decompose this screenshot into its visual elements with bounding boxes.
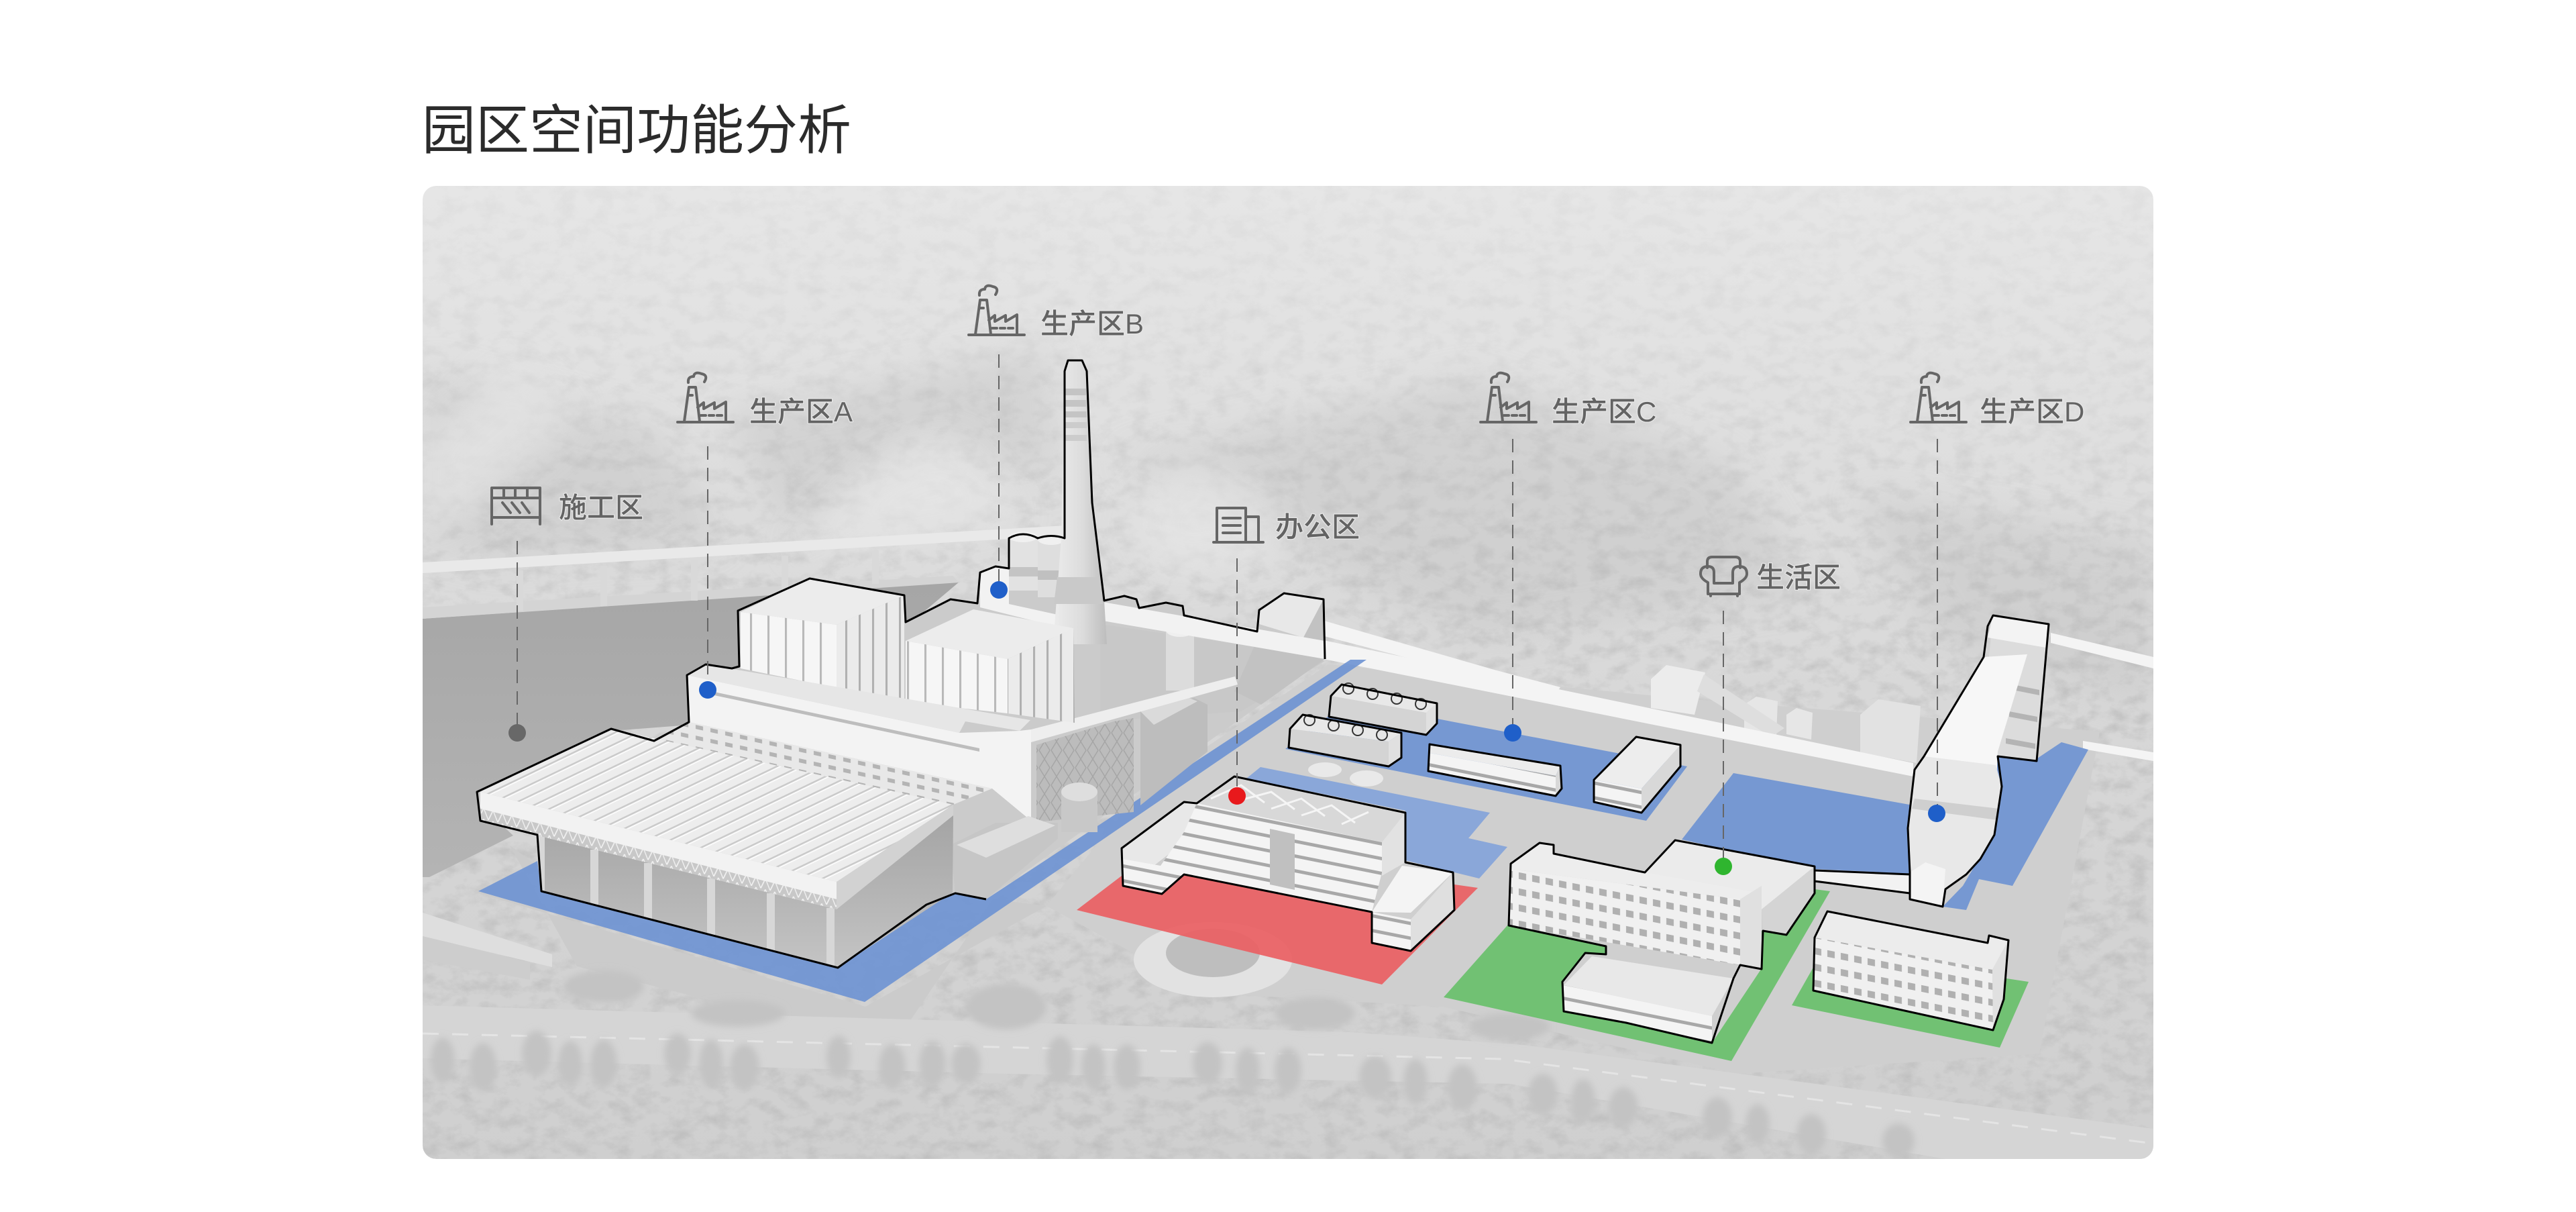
building: office bbox=[1122, 776, 1454, 951]
leader line: production C bbox=[1512, 439, 1513, 733]
leader line: office bbox=[1236, 558, 1238, 796]
dorm front wall bbox=[1509, 869, 1740, 965]
building: cooling unit south bbox=[1289, 715, 1401, 766]
marker: production B bbox=[990, 581, 1008, 599]
silo block 1 bbox=[741, 578, 904, 702]
dorm end wall bbox=[1740, 886, 1762, 969]
building: power plant A bbox=[477, 360, 1325, 968]
label: construction: 施工区 bbox=[559, 492, 643, 523]
annex wall bbox=[1564, 985, 1712, 1043]
tall tower at right bbox=[1234, 593, 1325, 705]
background buildings, behind the east site bbox=[1651, 665, 1921, 763]
icon: factory A bbox=[678, 373, 733, 422]
upper machinery bbox=[1100, 624, 1325, 721]
label: living: 生活区 bbox=[1756, 562, 1841, 593]
hall roof bbox=[480, 729, 953, 882]
marker: production C bbox=[1504, 724, 1521, 742]
icon: armchair bbox=[1701, 557, 1747, 596]
background dark forest slope bbox=[423, 582, 959, 877]
tanks on blue zone bbox=[1308, 762, 1383, 787]
blue zone: production C bbox=[1285, 717, 1687, 821]
green zone: living 2 bbox=[1792, 965, 2029, 1048]
boiler hall wall bbox=[687, 664, 1031, 821]
leader line: construction bbox=[517, 541, 518, 733]
building: small block C bbox=[1594, 737, 1680, 813]
leader line: production D bbox=[1937, 439, 1938, 813]
silo block 2 bbox=[906, 609, 1075, 723]
blue zone: behind the office bbox=[1246, 767, 1507, 878]
marker: construction bbox=[508, 724, 526, 742]
red zone: office bbox=[1077, 874, 1478, 984]
blue zone: production D bbox=[1682, 773, 1913, 874]
blue zone: production area A footprint bbox=[478, 660, 1366, 1002]
lower machinery truss bbox=[1036, 718, 1134, 822]
upper frame bbox=[1988, 615, 2049, 761]
plaza circle bbox=[1134, 922, 1292, 997]
diagonal conveyor bbox=[1031, 676, 1238, 742]
icon: office building bbox=[1214, 508, 1263, 542]
louvre strip bbox=[654, 722, 992, 805]
building: cooling unit north bbox=[1329, 683, 1437, 735]
label: production B: 生产区B bbox=[1040, 308, 1144, 340]
lower left ground bbox=[518, 858, 1033, 1004]
green zone: living 1 bbox=[1444, 889, 1830, 1061]
marker: office bbox=[1228, 787, 1246, 805]
title: 园区空间功能分析 bbox=[422, 101, 851, 160]
top conveyor bbox=[1103, 602, 1325, 659]
rear block bbox=[1645, 840, 1815, 935]
building: transfer tower D bbox=[1815, 615, 2049, 907]
base box bbox=[1910, 862, 1945, 907]
site ground bbox=[1046, 664, 2100, 1074]
round tower bbox=[1908, 756, 2002, 907]
distant elevated conveyor bbox=[423, 525, 1067, 619]
marker: living bbox=[1715, 858, 1732, 875]
conveyors across site bbox=[1320, 621, 2153, 776]
right wing bbox=[951, 816, 1058, 899]
main road bbox=[423, 1005, 2153, 1159]
building: dormitory 2 bbox=[1813, 911, 2008, 1030]
icon: construction barrier bbox=[492, 488, 540, 524]
label: office: 办公区 bbox=[1275, 511, 1360, 543]
blue zone: production D east bbox=[1943, 742, 2088, 910]
roadside trees bbox=[431, 970, 1915, 1158]
icon: factory D bbox=[1911, 373, 1966, 422]
label: production C: 生产区C bbox=[1552, 396, 1656, 427]
plant mass bbox=[477, 371, 1325, 968]
hall columns bbox=[537, 836, 835, 966]
building: dormitory 1 with annex bbox=[1509, 840, 1815, 1043]
marker: production A bbox=[699, 681, 716, 699]
label: production D: 生产区D bbox=[1980, 396, 2084, 427]
leader line: production A bbox=[707, 446, 708, 690]
icon: factory C bbox=[1481, 373, 1536, 422]
marker: production D bbox=[1928, 805, 1945, 822]
tree belts on hillside bbox=[431, 360, 2143, 678]
dorm roof bbox=[1511, 843, 1758, 899]
building: long low workshop bbox=[1428, 744, 1562, 796]
cylinders bbox=[1009, 532, 1065, 597]
label: production A: 生产区A bbox=[749, 396, 853, 427]
annex roof bbox=[1564, 956, 1733, 1016]
under hall bay bbox=[483, 815, 953, 968]
scrubber tower bbox=[1166, 623, 1194, 691]
inclined gallery bbox=[1924, 654, 2027, 799]
lower conveyor bbox=[1815, 870, 1910, 893]
leader line: production B bbox=[998, 354, 1000, 590]
plant outline bbox=[477, 360, 1325, 968]
light meadows bbox=[425, 383, 1272, 570]
panel: aerial site map bbox=[423, 186, 2153, 1159]
frame windows bbox=[2006, 685, 2039, 749]
icon: factory B bbox=[969, 286, 1024, 335]
storage tank bbox=[1061, 782, 1097, 832]
chimney bbox=[1053, 360, 1107, 644]
hillside tree texture bbox=[423, 186, 2153, 1159]
service blocks bbox=[1140, 695, 1208, 805]
small block under marker B bbox=[980, 566, 1100, 638]
background office block, lower left bbox=[423, 913, 552, 980]
leader line: living bbox=[1723, 611, 1724, 866]
hall fascia bbox=[480, 792, 953, 909]
panel background bbox=[423, 186, 2153, 1159]
